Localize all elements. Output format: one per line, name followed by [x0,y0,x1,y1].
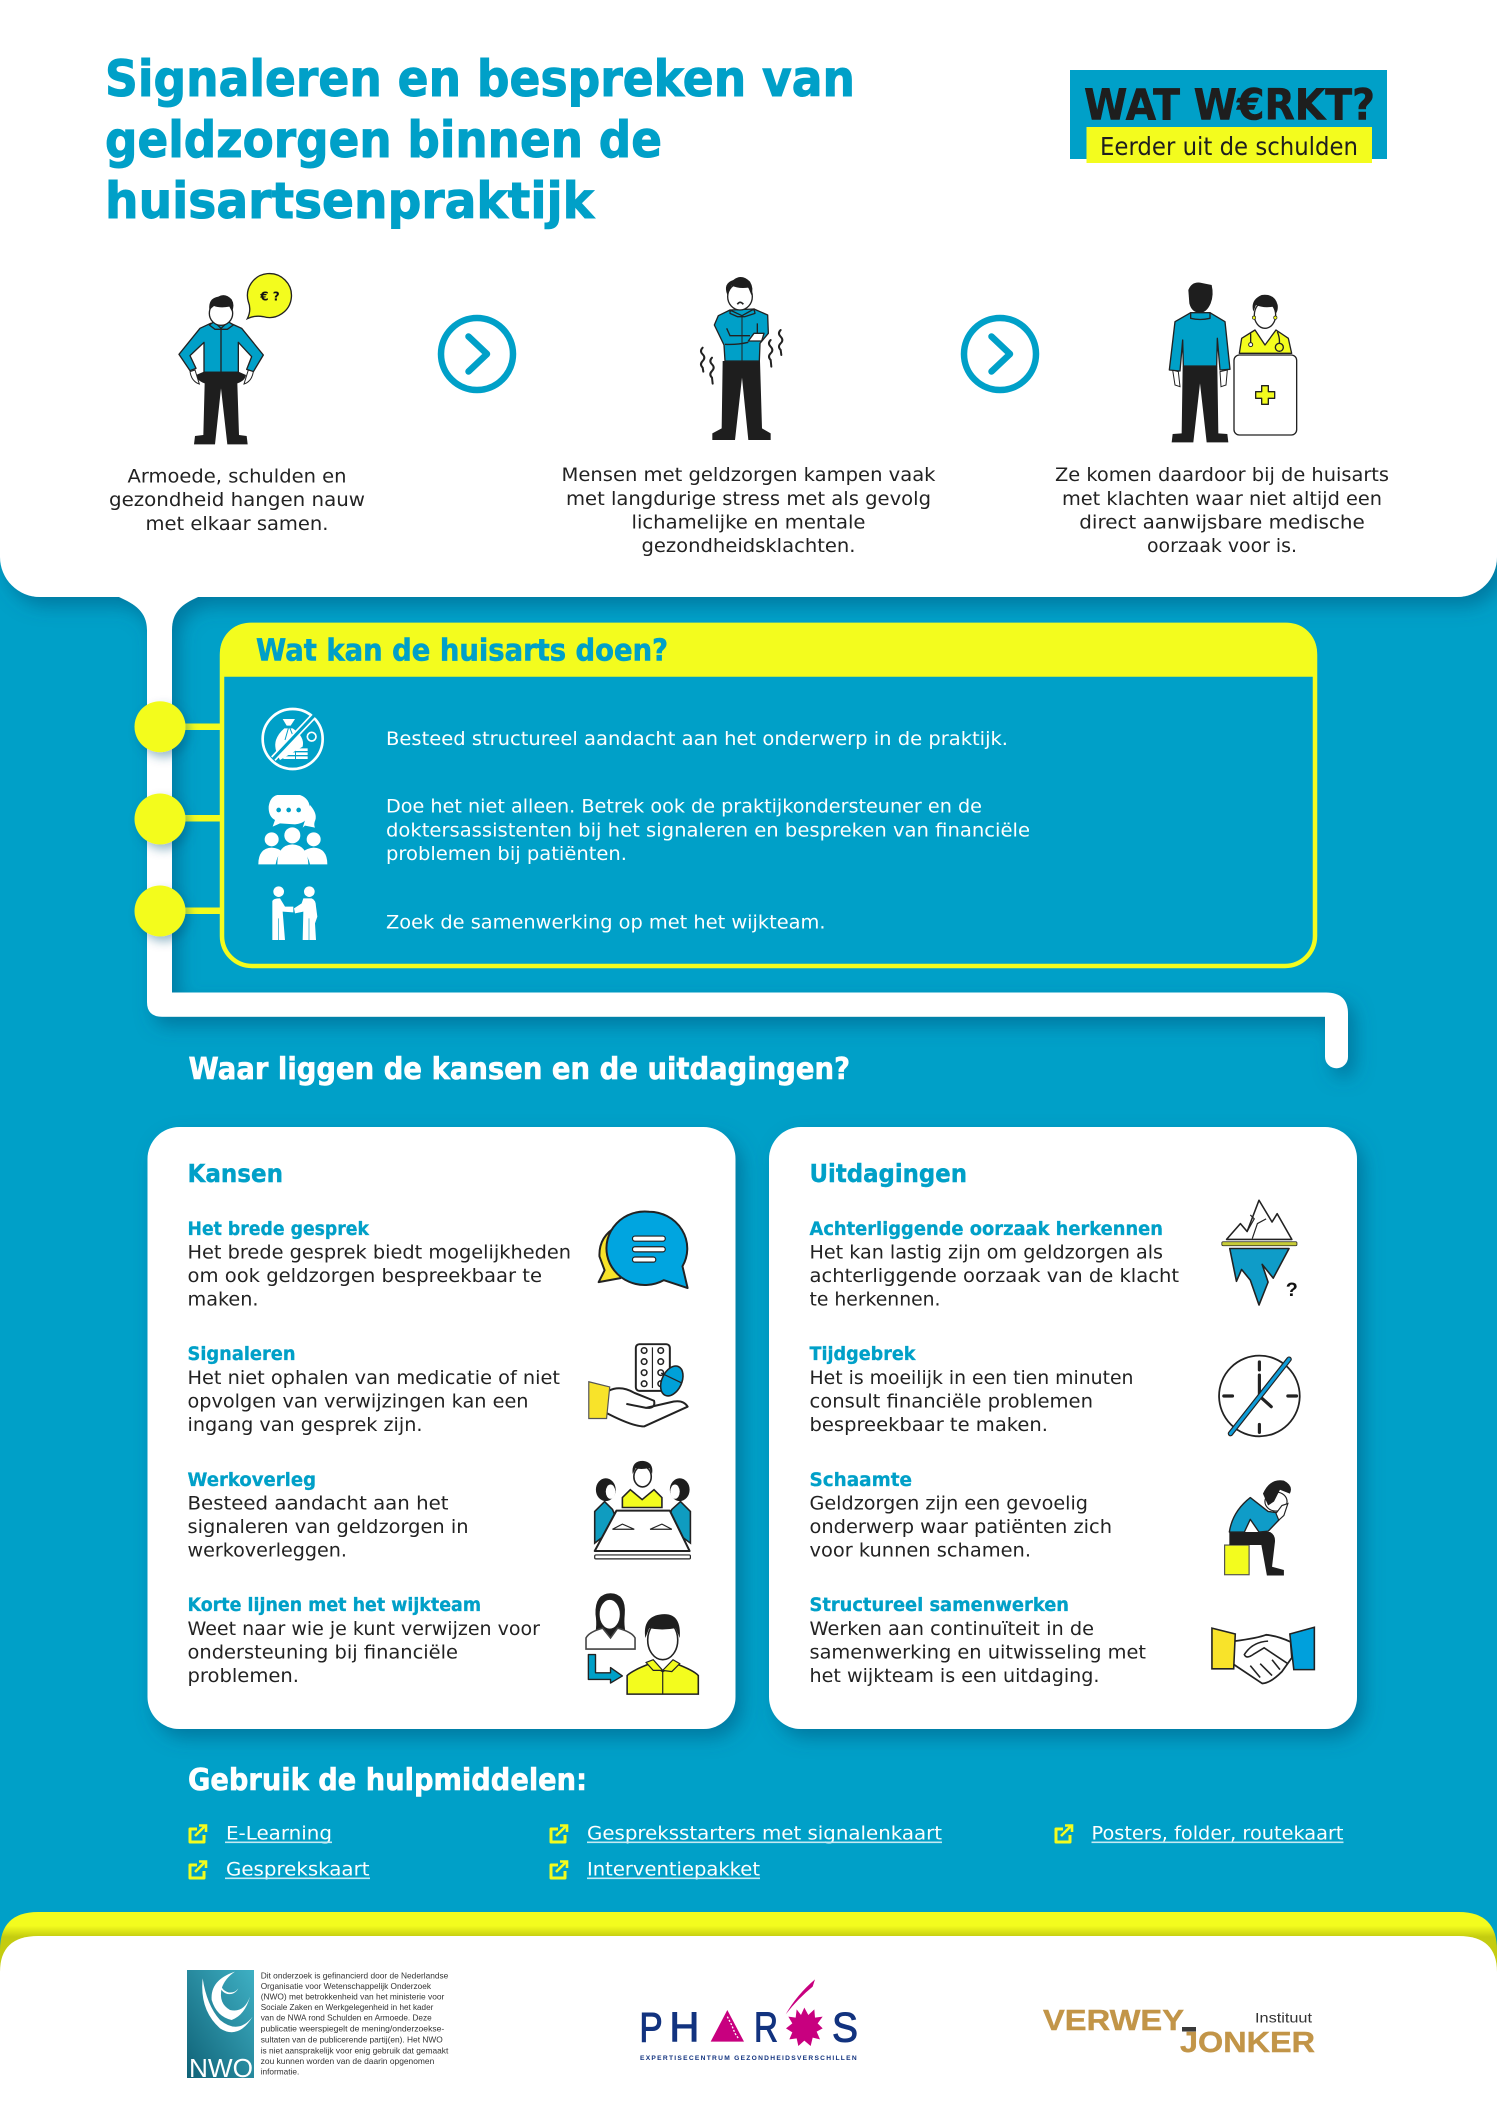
logo: Pharos: P [639,2004,663,2051]
panel: wat kan de huisarts doen [220,623,1317,966]
item: werkoverleg: Werkoverleg [188,1469,316,1491]
item: werkoverleg: signaleren van geldzorgen in [188,1516,468,1538]
icon: handshake [1212,1627,1314,1683]
item: structureel samenwerken [810,1594,1146,1687]
icon: stressed man with crossed arms [701,277,782,440]
item: achterliggende oorzaak: Het kan lastig zijn om geldzorgen als [810,1242,1163,1264]
text: action items: Zoek de samenwerking op met het wijkteam. [386,912,826,934]
text: step 3: Ze komen daardoor bij de huisarts [1055,464,1389,486]
links: hulpmiddelen [190,1822,1344,1880]
logo: Pharos [639,1979,858,2062]
item: structureel samenwerken: Werken aan continuïteit in de [810,1618,1094,1640]
title [105,50,855,230]
item: korte lijnen: ondersteuning bij financiële [188,1642,458,1664]
logo: Wat Werkt: WAT W€RKT? [1084,80,1375,130]
item: het brede gesprek: maken. [188,1288,258,1310]
logo: NWO with funding text: informatie. [261,2066,299,2076]
item: korte lijnen: Weet naar wie je kunt verwijzen voor [188,1618,540,1640]
link: gespreksstarters: Gespreksstarters met signalenkaart [587,1822,942,1844]
item: schaamte: Schaamte [810,1469,912,1491]
item: signaleren: ingang van gesprek zijn. [188,1414,422,1436]
item: tijdgebrek: consult financiële problemen [810,1390,1093,1412]
heading: hulpmiddelen: Gebruik de hulpmiddelen: [188,1763,587,1798]
icon: referral to wijkteam [586,1593,698,1694]
heading: kansen: Kansen [188,1159,283,1188]
title: huisartsenpraktijk [105,172,596,230]
item: het brede gesprek: Het brede gesprek [188,1218,369,1240]
icon: crossed out clock [1219,1356,1300,1436]
item: werkoverleg: Besteed aandacht aan het [188,1492,448,1514]
text: action items: Besteed structureel aandacht aan het onderwerp in de praktijk. [386,728,1008,750]
logo: NWO with funding text: Dit onderzoek is gefinancierd door de Nederlandse [261,1970,449,1980]
text: step 2: lichamelijke en mentale [632,512,866,534]
item: werkoverleg: werkoverleggen. [188,1540,347,1562]
text: step 2: gezondheidsklachten. [642,535,856,557]
logo: Verwey-Jonker Instituut [1043,2005,1315,2059]
arrow: chevron circle 1 [441,318,513,390]
item: schaamte [810,1469,1112,1562]
item: korte lijnen: Korte lijnen met het wijkteam [188,1594,481,1616]
icon: speech bubbles [599,1211,688,1288]
item: signaleren: Het niet ophalen van medicatie of niet [188,1367,560,1389]
item: structureel samenwerken: Structureel samenwerken [810,1594,1069,1616]
item: tijdgebrek [810,1343,1134,1436]
text: step 2 [562,464,936,557]
item: het brede gesprek: Het brede gesprek biedt mogelijkheden [188,1242,571,1264]
text: step 1: met elkaar samen. [146,513,328,535]
panel: kansen [148,1127,736,1729]
text: action items: doktersassistenten bij het signaleren en bespreken van financiële [386,819,1030,841]
logo: NWO with funding text: (NWO) met betrokkenheid van het ministerie voor [261,1992,445,2002]
icon: team conversation [258,795,327,864]
item: signaleren [188,1343,560,1436]
item: schaamte: voor kunnen schamen. [810,1540,1031,1562]
panel: uitdagingen [769,1127,1357,1729]
link: gesprekskaart: Gesprekskaart [226,1858,370,1880]
text: step 1 [109,466,365,535]
logo: NWO with funding text: is niet aansprakelijk voor enig gebruik dat gemaakt [261,2045,449,2055]
panel: top white intro with connector pipe [0,0,1497,1068]
text: step 2: met langdurige stress met als gevolg [566,488,931,510]
icon: no money [263,709,323,769]
item: schaamte: onderwerp waar patiënten zich [810,1516,1112,1538]
logo: NWO with funding text: Organisatie voor Wetenschappelijk Onderzoek [261,1981,432,1991]
logo: Wat Werkt [1070,70,1387,163]
logo: Pharos: EXPERTISECENTRUM GEZONDHEIDSVERSCHILLEN [640,2055,857,2062]
logo: Verwey-Jonker Instituut: VERWEY [1043,2005,1184,2037]
icon: two people shaking hands [272,886,317,940]
logo: Pharos: R [754,2004,778,2051]
logo: NWO with funding text: publicatie weerspiegelt de mening/onderzoekse- [261,2024,445,2034]
logo: NWO with funding text [187,1970,449,2083]
logo: Pharos: H [669,2004,699,2051]
item: tijdgebrek: Tijdgebrek [810,1343,916,1365]
text: step 1: gezondheid hangen nauw [109,489,365,511]
link: e-learning: E-Learning [226,1822,332,1844]
footer band [0,1912,1497,2117]
item: achterliggende oorzaak: te herkennen. [810,1288,940,1310]
icon: iceberg [1222,1200,1298,1305]
arrow: chevron circle 2 [964,318,1036,390]
logo: Verwey-Jonker Instituut: Instituut [1255,2010,1312,2026]
icon: person in shame [1225,1480,1291,1576]
item: structureel samenwerken: samenwerking en uitwisseling met [810,1642,1146,1664]
logo: NWO with funding text: NWO [189,2053,253,2083]
item: achterliggende oorzaak: achterliggende oorzaak van de klacht [810,1265,1179,1287]
timeline dots and connectors [134,701,222,936]
item: het brede gesprek [188,1218,571,1310]
item: tijdgebrek: Het is moeilijk in een tien minuten [810,1367,1134,1389]
title: Signaleren en bespreken van [105,50,855,108]
heading: uitdagingen: Uitdagingen [810,1159,967,1188]
item: tijdgebrek: bespreekbaar te maken. [810,1414,1048,1436]
heading: kansen en uitdagingen: Waar liggen de kansen en de uitdagingen? [188,1052,850,1087]
text: action items: problemen bij patiënten. [386,843,627,865]
logo: NWO with funding text: Sociale Zaken en Werkgelegenheid in het kader [261,2002,433,2012]
item: schaamte: Geldzorgen zijn een gevoelig [810,1492,1088,1514]
icon: patient and doctor at desk [1169,283,1297,442]
title: geldzorgen binnen de [105,111,662,169]
logo: Wat Werkt: Eerder uit de schulden [1100,132,1358,161]
link: interventiepakket: Interventiepakket [587,1858,760,1880]
text: step 3: oorzaak voor is. [1147,535,1297,557]
link: posters: Posters, folder, routekaart [1092,1822,1344,1844]
icon: iceberg: ? [1286,1279,1298,1301]
logo: Pharos: S [832,2004,858,2051]
text: action items: Doe het niet alleen. Betrek ook de praktijkondersteuner en de [386,796,982,818]
icon: man with empty pockets and speech bubble: € ? [259,290,280,304]
step texts [109,464,1389,557]
item: werkoverleg [188,1469,468,1562]
text: step 1: Armoede, schulden en [128,466,346,488]
logo: NWO with funding text: sultaten van de publicerende partij(en). Het NWO [261,2035,443,2045]
text: step 2: Mensen met geldzorgen kampen vaak [562,464,936,486]
text: action items [386,728,1030,934]
heading: wat kan de huisarts doen: Wat kan de huisarts doen? [256,634,668,669]
text: step 3: met klachten waar niet altijd een [1062,488,1382,510]
logo: NWO with funding text: van de NWA rond Schulden en Armoede. Deze [261,2013,432,2023]
text: step 3 [1055,464,1389,557]
item: achterliggende oorzaak: Achterliggende oorzaak herkennen [810,1218,1163,1240]
logo: NWO with funding text: zou kunnen worden van de daarin opgenomen [261,2056,435,2066]
logo: Verwey-Jonker Instituut: JONKER [1180,2027,1315,2059]
item: het brede gesprek: om ook geldzorgen bespreekbaar te [188,1265,542,1287]
item: signaleren: Signaleren [188,1343,296,1365]
text: step 3: direct aanwijsbare medische [1079,512,1365,534]
item: korte lijnen: problemen. [188,1665,299,1687]
icon: meeting at table [595,1461,690,1559]
icon: man with empty pockets and speech bubble [179,274,291,444]
item: achterliggende oorzaak [810,1218,1179,1310]
item: korte lijnen [188,1594,540,1687]
icon: hand with medication [589,1344,688,1426]
item: structureel samenwerken: het wijkteam is een uitdaging. [810,1665,1100,1687]
item: signaleren: opvolgen van verwijzingen kan een [188,1390,528,1412]
